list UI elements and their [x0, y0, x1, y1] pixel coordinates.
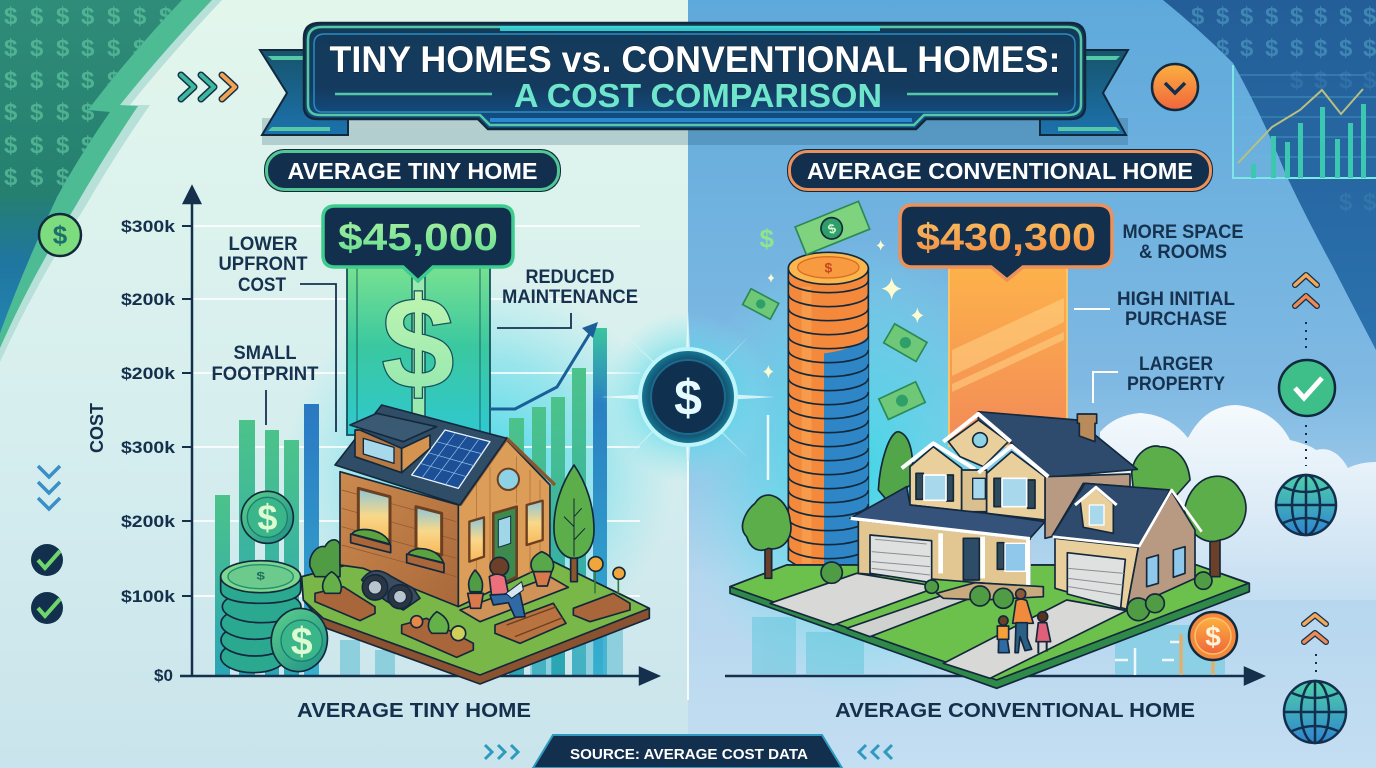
label: larger property	[1127, 353, 1225, 395]
price callout: conventional home: $430,300	[916, 217, 1096, 259]
heading pill: tiny home	[264, 149, 561, 192]
banner inner border	[314, 34, 1075, 112]
side windows	[1147, 547, 1185, 587]
background: top-right corner with dollar pattern: $$$$$$$$	[1191, 3, 1376, 30]
mini chart bars	[1251, 104, 1366, 178]
middle wall	[962, 470, 987, 512]
porch steps and rail	[937, 583, 1043, 600]
y axis tick labels: $0	[154, 666, 173, 685]
family	[997, 589, 1051, 653]
icon: check large	[1279, 360, 1335, 416]
y axis ticks	[182, 226, 192, 596]
shrubs	[821, 562, 1212, 621]
icon: dollar coin left: $	[53, 220, 68, 250]
label: average conventional home axis: AVERAGE CONVENTIONAL HOME	[835, 700, 1195, 722]
lawn	[730, 565, 1248, 680]
right wing side wall	[1127, 492, 1195, 609]
driveway right	[943, 600, 1127, 678]
background: top-left corner with dollar pattern: $$$$$$	[4, 35, 147, 62]
icon: dollar coin left	[39, 214, 81, 256]
floating dollar: $	[759, 223, 774, 253]
ribbon left	[260, 50, 348, 135]
solar panel	[412, 430, 490, 488]
label: high initial purchase: PURCHASE	[1125, 308, 1227, 330]
ground floor wall	[858, 520, 1030, 587]
side wall	[1045, 474, 1130, 538]
icon: globe 2	[1284, 681, 1346, 743]
label: larger property: LARGER	[1139, 353, 1213, 375]
badge inner ring	[651, 360, 725, 434]
background: top-right corner with dollar pattern	[1163, 0, 1376, 350]
right wing trim	[1053, 490, 1202, 546]
porthole window	[498, 469, 519, 490]
steps	[495, 603, 566, 643]
label: lower upfront cost: COST	[238, 274, 286, 296]
background: left glow behind tiny house	[285, 280, 675, 660]
background: cloud	[1100, 405, 1376, 600]
price callout: conventional home	[900, 205, 1112, 280]
tower top rim	[798, 257, 859, 278]
house gable wall	[458, 440, 550, 607]
walkway	[847, 595, 970, 637]
chart gridlines	[192, 226, 640, 596]
leader: reduced maintenance	[497, 313, 571, 328]
front coin	[267, 605, 331, 675]
potted plant on deck left	[468, 570, 483, 608]
platform base	[730, 565, 1249, 688]
right chart base	[725, 266, 1263, 684]
left chart	[87, 187, 658, 685]
ribbon left fold	[268, 56, 330, 131]
dormer roof	[350, 413, 437, 442]
y axis title: COST	[87, 403, 107, 453]
background: top-left corner with dollar pattern: $$$$$	[4, 67, 121, 94]
right wing roof	[1052, 483, 1170, 546]
heading pill: tiny home: AVERAGE TINY HOME	[288, 158, 538, 184]
label: larger property: PROPERTY	[1127, 373, 1225, 395]
dotted link 1	[1305, 322, 1307, 350]
flower box right	[407, 549, 444, 573]
right wing front wall	[1055, 538, 1138, 609]
background: right half	[688, 0, 1376, 768]
ribbon right fold	[1058, 56, 1120, 131]
big dollar sign: $	[382, 270, 454, 416]
side window	[469, 517, 484, 562]
source tab	[533, 735, 842, 768]
top coin	[221, 561, 301, 593]
big dollar stem	[412, 272, 425, 432]
main roof	[978, 412, 1137, 477]
front door	[963, 538, 979, 580]
icon: check 2	[31, 592, 63, 624]
right blue bar	[593, 328, 607, 676]
leader: small footprint	[265, 390, 267, 425]
y axis tick labels: $200k	[121, 290, 176, 309]
side window 2	[527, 501, 543, 545]
y axis tick labels: $200k	[121, 512, 176, 531]
flower box left	[351, 530, 391, 553]
potted plant on deck right	[531, 552, 554, 586]
background: top-right corner with dollar pattern: $$$$$$$	[1216, 35, 1376, 62]
raised bed center	[402, 612, 473, 657]
ribbon right	[1040, 50, 1128, 135]
trailer	[362, 571, 420, 610]
person	[489, 557, 525, 617]
floating coin inner	[247, 497, 287, 537]
right tree	[1185, 476, 1246, 577]
icon: check 1	[31, 544, 63, 576]
leader: larger property	[1093, 372, 1118, 403]
front coin inner	[281, 620, 322, 661]
left garage door lines	[872, 539, 930, 575]
back-right tree	[1132, 446, 1190, 510]
top coin rim	[228, 565, 293, 589]
title banner shadow	[262, 118, 1128, 145]
floating coin	[241, 491, 293, 543]
back-left tree	[878, 432, 913, 500]
dormer	[1075, 487, 1117, 533]
orange coin: $	[1205, 621, 1221, 652]
icon: chevrons up right 1	[1295, 275, 1317, 306]
dotted link 2	[1305, 425, 1307, 466]
shrub	[310, 540, 340, 577]
gable boards	[477, 457, 540, 593]
door glass	[498, 516, 511, 547]
leader: lower upfront cost	[300, 284, 336, 432]
badge ring	[640, 349, 736, 445]
family: right child	[1036, 612, 1051, 653]
main green bar	[347, 240, 490, 435]
white tick marks	[768, 415, 1182, 675]
y axis tick labels: $100k	[121, 587, 176, 606]
roof	[335, 405, 507, 505]
family: left child	[997, 616, 1009, 653]
mini chart gridlines	[1233, 75, 1376, 157]
icon: orange chevron circle	[1152, 64, 1198, 110]
label: reduced maintenance: MAINTENANCE	[502, 286, 638, 308]
wheel back	[362, 575, 388, 600]
window left	[358, 488, 390, 543]
stack coins	[221, 577, 301, 673]
lawn	[302, 562, 649, 675]
label: reduced maintenance	[502, 266, 638, 308]
y axis tick labels	[121, 217, 176, 685]
center gable wall	[987, 452, 1045, 520]
label: small footprint: SMALL	[234, 342, 297, 364]
title line 1: TINY HOMES vs. CONVENTIONAL HOMES:	[330, 39, 1060, 80]
x axis	[725, 668, 1263, 684]
badge rays	[601, 310, 775, 485]
leader: high initial purchase	[1074, 308, 1110, 310]
floating bill 1	[743, 289, 779, 319]
tan poles	[1181, 634, 1213, 675]
label: high initial purchase: HIGH INITIAL	[1117, 288, 1235, 310]
solar grid	[420, 433, 483, 484]
conventional home scene	[730, 412, 1249, 688]
left gable trim	[902, 443, 975, 469]
platform	[302, 562, 649, 684]
step lines	[507, 607, 563, 637]
upper gable trim	[943, 414, 1011, 442]
dotted link 3	[1315, 654, 1317, 674]
porch columns	[941, 533, 1028, 587]
front roof trim	[851, 518, 1030, 539]
background: top-left corner with dollar pattern: $$$	[4, 164, 70, 191]
background: top-left corner with dollar pattern	[0, 0, 182, 333]
front coin dollar: $	[291, 620, 313, 664]
flowers	[588, 557, 625, 593]
background: left corner green band	[0, 0, 212, 348]
heading pill: conventional home	[787, 149, 1213, 192]
icon: chevrons down left	[38, 466, 60, 509]
background: left corner pale shadow	[0, 0, 222, 362]
badge rays diagonal	[625, 335, 750, 460]
bars below platform	[340, 630, 623, 676]
mini chart line	[1238, 89, 1363, 163]
main bar side stripes	[357, 240, 480, 435]
floating coin dollar: $	[257, 497, 277, 538]
banner green border	[308, 27, 1081, 125]
left blue bar	[304, 404, 319, 676]
dormer side	[402, 435, 430, 473]
background: left half	[0, 0, 688, 768]
icon: globe 1	[1276, 475, 1336, 535]
raised bed left	[315, 572, 375, 621]
center gable trim	[978, 446, 1048, 477]
label: more space and rooms	[1122, 221, 1244, 263]
bill on top	[795, 201, 870, 255]
tower coin edges	[788, 280, 868, 559]
left gable wall	[910, 447, 962, 511]
left upper window	[916, 473, 953, 501]
tower blue half	[824, 337, 868, 577]
chimney	[1077, 414, 1097, 442]
window right	[416, 507, 442, 555]
floating bill 2	[884, 324, 927, 362]
driveway left	[770, 573, 938, 625]
heading pill: conventional home: AVERAGE CONVENTIONAL HOME	[807, 158, 1193, 184]
price callout: tiny home: $45,000	[338, 217, 498, 259]
label: more space and rooms: MORE SPACE	[1122, 221, 1244, 243]
y axis tick labels: $300k	[121, 217, 176, 236]
center lower divider	[687, 462, 689, 700]
family: father	[1013, 589, 1033, 653]
raised bed right	[573, 593, 630, 622]
dormer	[355, 430, 402, 473]
label: lower upfront cost: UPFRONT	[218, 253, 308, 275]
label: lower upfront cost: LOWER	[228, 233, 298, 255]
sparkles	[763, 240, 923, 378]
gable trim	[460, 438, 555, 505]
banner panel	[304, 23, 1085, 129]
tower top dollar: $	[824, 260, 832, 276]
source tab: SOURCE: AVERAGE COST DATA	[570, 747, 809, 763]
title line 2: A COST COMPARISON	[514, 77, 882, 114]
banner top glow	[500, 26, 880, 31]
price callout: tiny home	[323, 206, 513, 281]
tower body	[788, 268, 868, 574]
lower left roof	[850, 487, 1045, 538]
mini chart axes	[1233, 65, 1376, 178]
tower highlight	[792, 287, 822, 563]
background: right glow behind tower	[680, 240, 1040, 700]
y axis	[184, 187, 200, 676]
icon: chevrons up right 2	[1304, 615, 1326, 642]
right garage door	[1067, 553, 1125, 608]
banner bottom glow	[490, 118, 912, 122]
background: top-left corner with dollar pattern: $$$$	[4, 99, 95, 126]
label: more space and rooms: & ROOMS	[1139, 241, 1227, 263]
gable round window	[973, 433, 987, 447]
bill on top: $	[826, 220, 839, 237]
orange bar shine	[952, 298, 1064, 392]
coin tower	[743, 201, 927, 577]
house side wall	[340, 472, 458, 607]
left tree	[742, 495, 791, 578]
dormer window	[363, 438, 394, 463]
label: small footprint	[212, 342, 319, 385]
tiny home scene	[302, 405, 649, 684]
label: reduced maintenance: REDUCED	[526, 266, 614, 288]
y axis tick labels: $300k	[121, 438, 176, 457]
center upper window	[994, 478, 1035, 508]
growth arrow	[490, 330, 592, 409]
title banner	[260, 23, 1128, 135]
lower glass panels	[752, 617, 1225, 675]
background: top-right corner with dollar pattern: $$	[1339, 189, 1376, 216]
tower top coin	[788, 252, 868, 284]
y axis tick labels: $200k	[121, 364, 176, 383]
left garage door	[870, 535, 932, 583]
top right mini chart	[1233, 65, 1376, 178]
left supporting bars	[215, 420, 299, 676]
title accent left	[335, 93, 492, 95]
orange coin	[1189, 612, 1237, 660]
x axis	[180, 668, 658, 684]
background: top-right corner with dollar pattern: $$$$	[1290, 67, 1376, 94]
arrowhead	[582, 322, 598, 338]
background: top-left corner with dollar pattern: $$$$	[4, 132, 95, 159]
right supporting bars	[509, 368, 586, 676]
deck	[460, 577, 568, 622]
middle window	[973, 478, 985, 499]
label: small footprint: FOOTPRINT	[212, 363, 319, 385]
top coin dollar: $	[256, 570, 266, 582]
title accent right	[907, 93, 1058, 95]
siding lines	[342, 490, 457, 577]
background: top-left corner with dollar pattern: $$$$$$$	[4, 3, 173, 30]
orange bar	[949, 266, 1067, 446]
upper gable wall	[948, 420, 1008, 467]
coin stack	[221, 491, 331, 675]
wheel front	[388, 585, 412, 609]
icon: chevrons right, top left	[181, 75, 235, 99]
ground window	[997, 543, 1026, 571]
floating bill 3	[879, 382, 925, 420]
door	[493, 507, 517, 588]
badge dollar: $	[674, 370, 702, 426]
right garage lines	[1068, 568, 1124, 595]
label: high initial purchase	[1117, 288, 1235, 330]
center badge	[601, 310, 775, 485]
label: lower upfront cost	[218, 233, 308, 296]
icon: chevrons left, bottom	[859, 745, 892, 759]
tree	[554, 465, 594, 582]
badge glow	[603, 312, 773, 482]
icon: chevrons right, bottom	[485, 745, 518, 759]
label: average tiny home axis: AVERAGE TINY HOME	[297, 700, 531, 722]
